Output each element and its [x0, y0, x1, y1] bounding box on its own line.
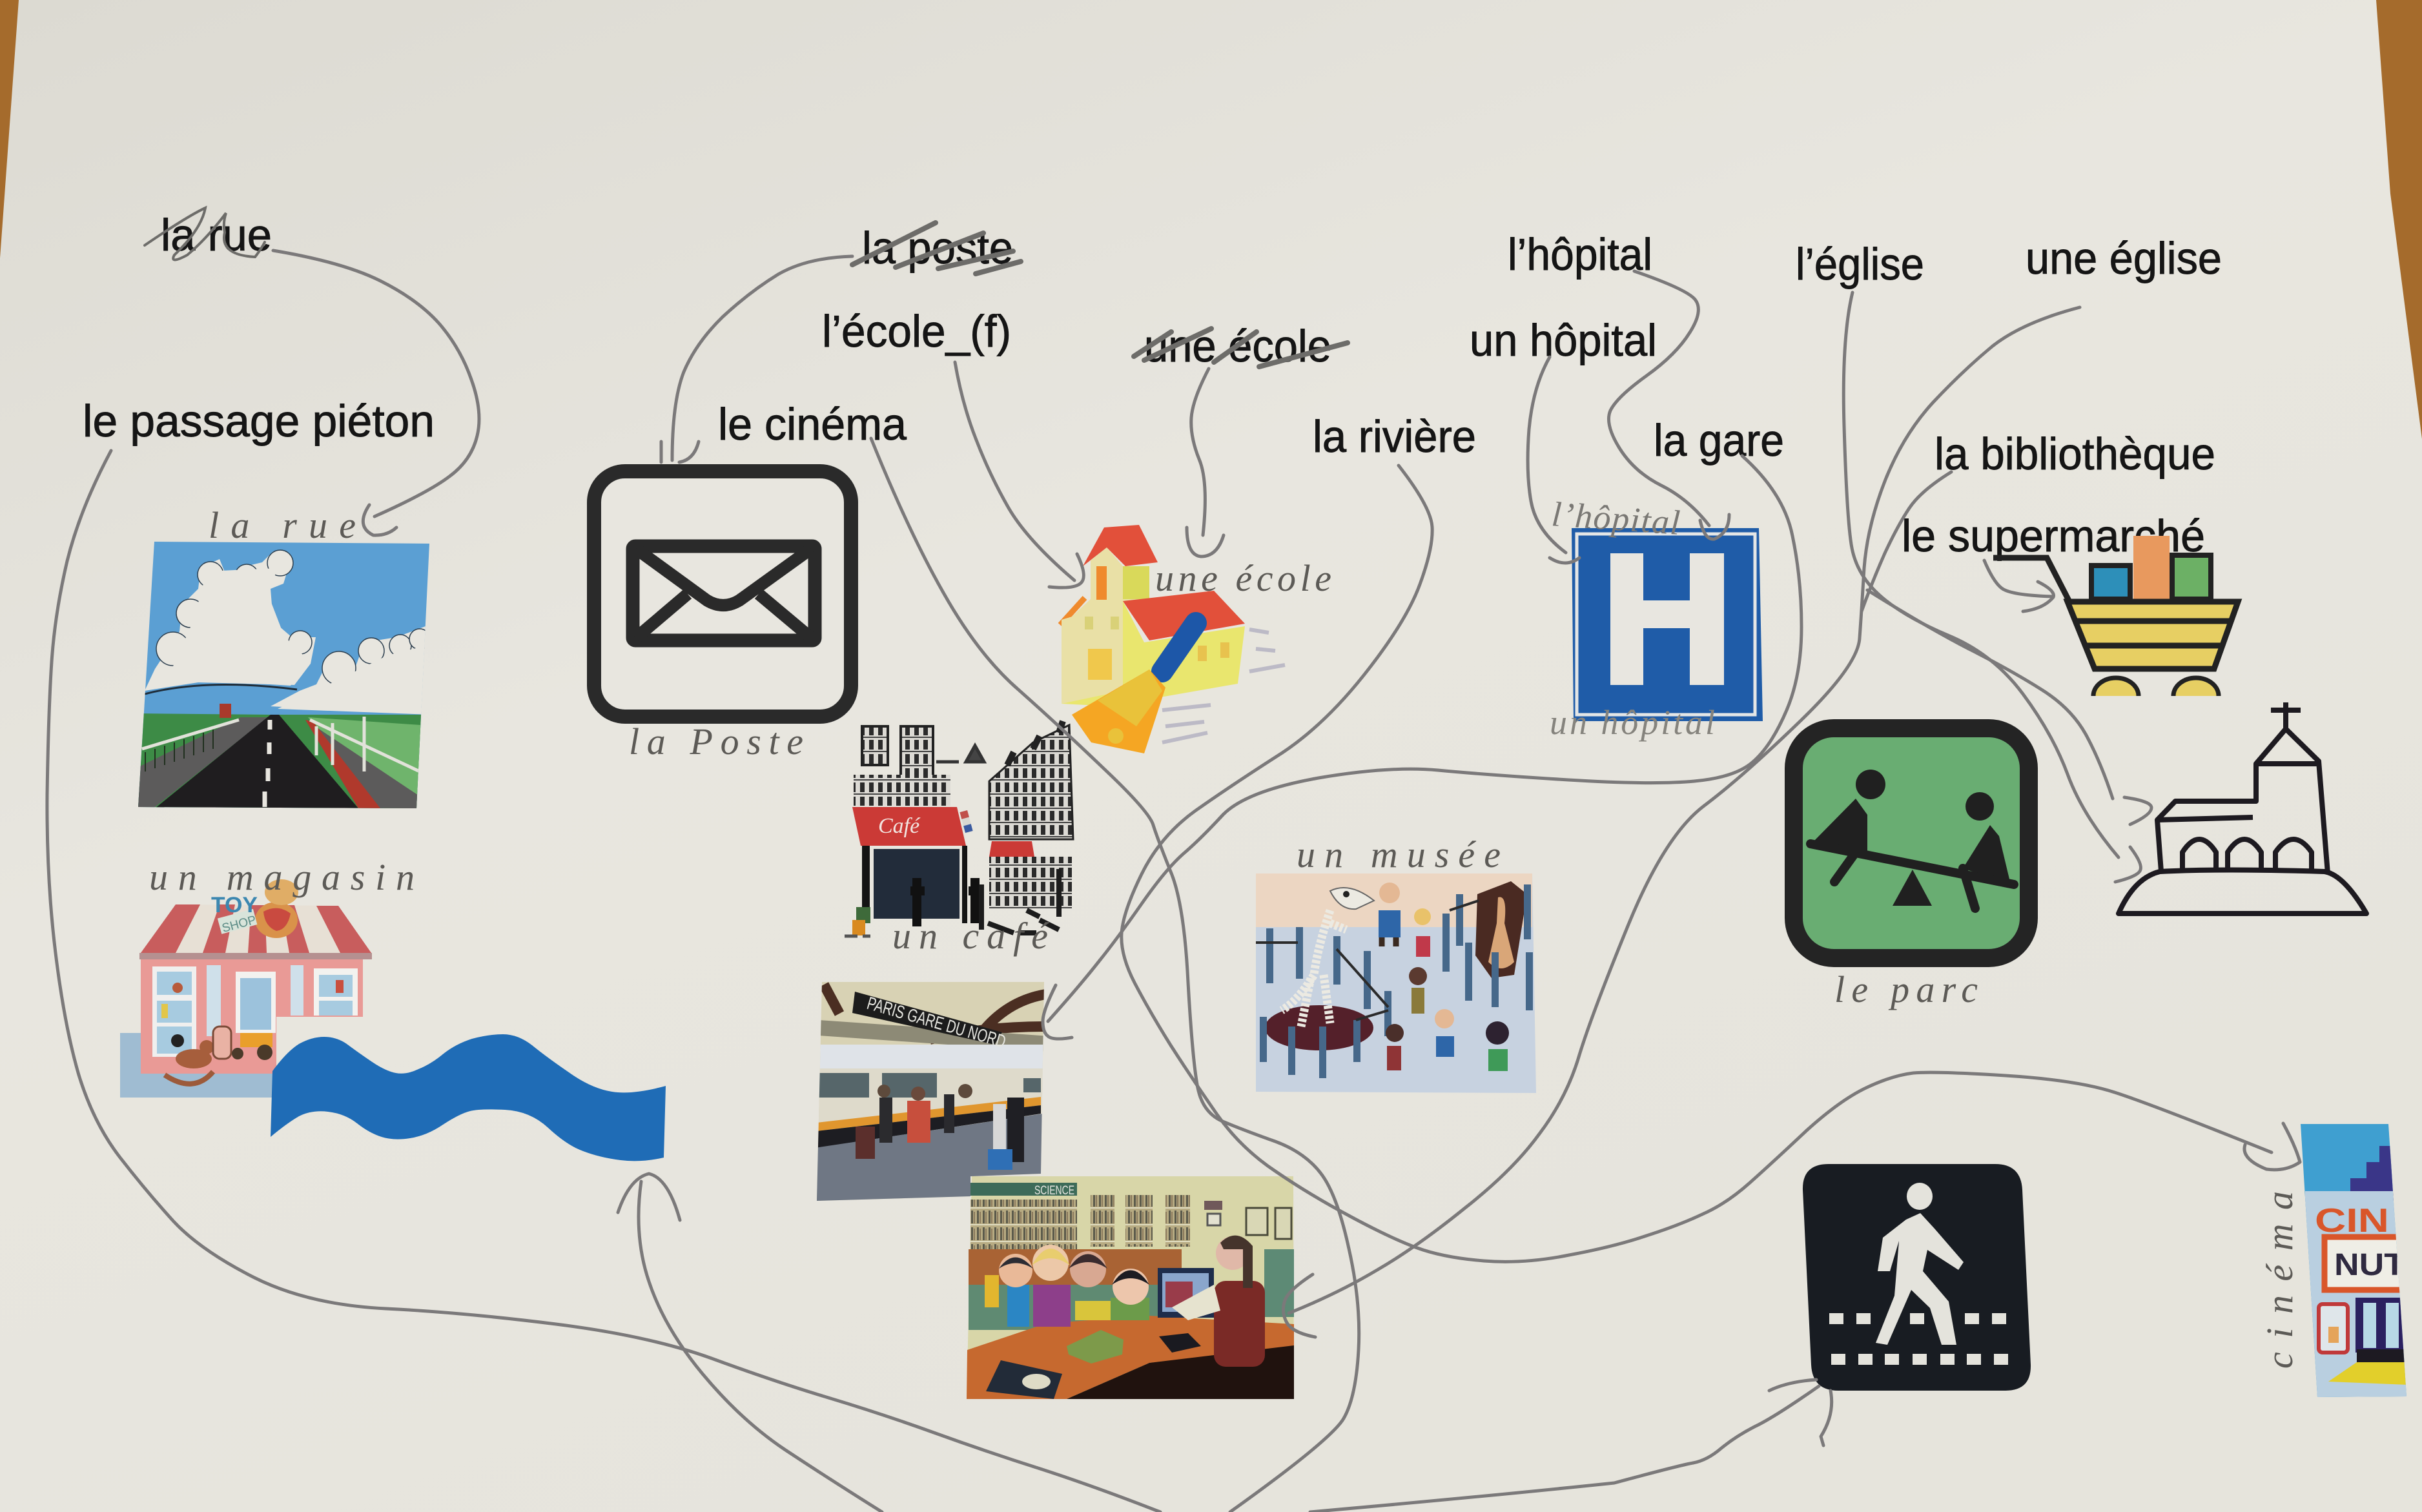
picture: road [129, 536, 439, 813]
picture: library: SCIENCE [1034, 1184, 1074, 1198]
handwritten label: l'hôpital: l’hôpital [1550, 495, 1681, 542]
connector: le cinéma [871, 438, 1359, 1512]
arrow hook: church lower [2115, 847, 2140, 882]
connector: l'église [1843, 292, 2119, 857]
scribble over une école [1134, 329, 1348, 367]
connector: pedestrian crossing [1310, 1386, 1819, 1512]
printed word: l'hôpital: l’hôpital [1508, 229, 1652, 280]
hook to library [1283, 1274, 1315, 1337]
connector: la gare [1048, 456, 1801, 1021]
scribble over la rue [145, 208, 265, 260]
printed word: la gare: la gare [1654, 415, 1784, 465]
icon: post envelope [594, 471, 851, 717]
arrow hook: gare [1043, 985, 1072, 1039]
arrow hook: school top [1187, 527, 1224, 557]
connector: l'école [955, 362, 1074, 580]
handwritten label: un café: un café [892, 915, 1049, 957]
connector: un hôpital [1528, 357, 1566, 553]
printed word: une église: une église [2026, 233, 2222, 283]
arrow hook: hospital left [1550, 558, 1579, 563]
picture: toy shop: TOY [211, 893, 258, 917]
arrow hook: hospital top [1700, 515, 1729, 539]
arrow hook: pedestrian crossing [1769, 1380, 1832, 1446]
connector: church upper [1867, 590, 2113, 799]
printed word: une école: une école [1144, 321, 1331, 371]
picture: museum [1256, 873, 1536, 1093]
picture: train station: PARIS GARE DU NORD [865, 993, 1008, 1052]
icon: pedestrian crossing [1803, 1164, 2031, 1391]
picture: toy shop: SHOP [221, 914, 258, 935]
printed word: l'école: l’école_(f) [822, 306, 1011, 356]
picture: cinema [2301, 1124, 2407, 1397]
scribble over la poste [852, 223, 1021, 274]
picture: train station [813, 978, 1049, 1207]
picture: school and bell [1060, 525, 1285, 753]
printed word: le passage piéton: le passage piéton [83, 396, 435, 446]
icon: shopping cart [1993, 536, 2238, 696]
arrow hook: cart [2023, 582, 2053, 611]
arrow hook: la rue [363, 505, 396, 535]
connector: la rue [273, 250, 479, 516]
printed word: le cinéma: le cinéma [718, 399, 907, 449]
picture: river [271, 1034, 666, 1161]
printed word: le supermarché: le supermarché [1902, 511, 2205, 561]
handwritten label: le parc: le parc [1834, 968, 1978, 1010]
connector: le supermarché [1984, 560, 2053, 597]
connector: une école [1191, 369, 1209, 535]
handwritten label: une école: une école [1155, 557, 1331, 599]
printed word: la rue: la rue [161, 210, 272, 260]
arrow hook: school left [1049, 554, 1083, 587]
connector: le passage piéton [47, 451, 1160, 1512]
printed word: l'église: l’église [1796, 239, 1924, 289]
arrow head: river [618, 1174, 680, 1220]
handwritten label: la rue: la rue [209, 504, 356, 546]
connector: la rivière [1122, 465, 2272, 1262]
icon: park seesaw [1794, 728, 2029, 958]
picture: cinema: NUT [2334, 1248, 2405, 1282]
arrow hook: cinema [2244, 1123, 2300, 1170]
handwritten label: cinéma: cinéma [2259, 1191, 2301, 1369]
handwritten label: la Poste: la Poste [629, 720, 803, 762]
picture: café [845, 721, 1073, 936]
icon: church [2119, 702, 2366, 914]
connector: une église [1289, 307, 2080, 1313]
handwritten label: un magasin: un magasin [149, 856, 415, 898]
icon: hospital sign [1572, 528, 1763, 721]
connector: l'hôpital [1608, 271, 1709, 526]
arrow hook: church upper [2124, 797, 2151, 824]
connector: la bibliothèque [1862, 472, 1951, 611]
picture: café: Café [878, 814, 921, 838]
handwritten label: un hôpital: un hôpital [1550, 703, 1715, 742]
picture: cinema: CIN [2315, 1202, 2389, 1240]
handwritten label: un musée: un musée [1297, 833, 1501, 875]
picture: library [967, 1176, 1294, 1399]
printed word: la rivière: la rivière [1313, 411, 1476, 462]
connector: river stem [639, 1181, 882, 1512]
picture: toy shop [120, 879, 372, 1098]
printed word: un hôpital: un hôpital [1470, 315, 1657, 365]
connector: la poste [672, 256, 852, 460]
printed word: la bibliothèque: la bibliothèque [1935, 429, 2215, 479]
printed word: la poste: la poste [862, 223, 1013, 273]
arrow hook: post [661, 442, 699, 462]
